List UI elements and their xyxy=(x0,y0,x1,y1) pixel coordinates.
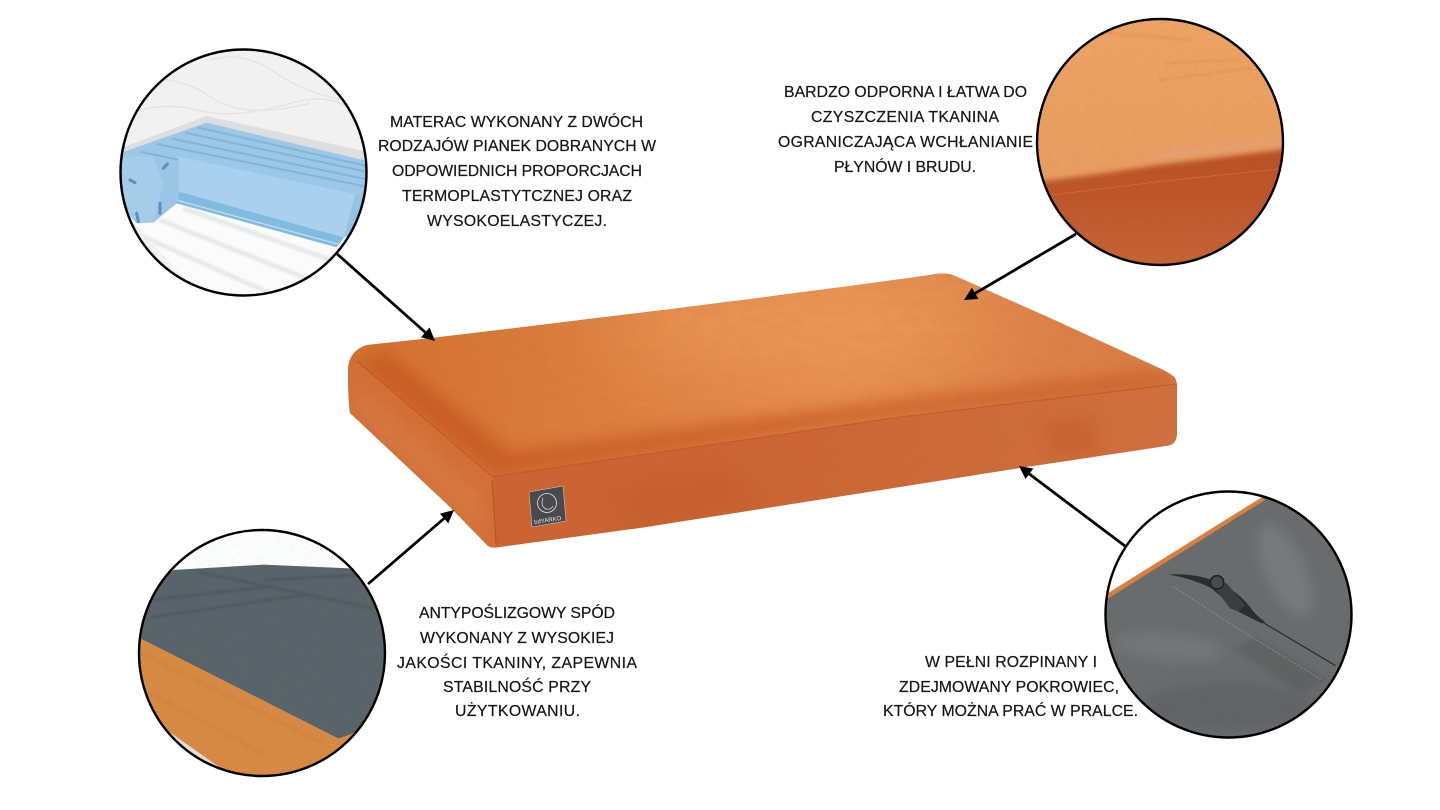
text: underside description xyxy=(397,603,637,720)
text: foam description: MATERAC WYKONANY Z DWÓCH xyxy=(390,112,643,131)
text: underside description: ANTYPOŚLIZGOWY SPÓD xyxy=(419,603,615,622)
text: zipper description: W PEŁNI ROZPINANY I xyxy=(925,654,1097,671)
text: fabric description xyxy=(778,84,1033,176)
circle: anti-slip underside detail xyxy=(138,528,386,778)
mattress product photo xyxy=(340,270,1185,555)
circle: foam interior detail xyxy=(119,48,368,297)
circle: zipper detail xyxy=(1104,490,1353,739)
text: underside description: UŻYTKOWANIU. xyxy=(455,701,580,720)
arrow: fabric to mattress xyxy=(964,234,1076,300)
text: fabric description: OGRANICZAJĄCA WCHŁANIANIE xyxy=(778,134,1033,151)
text: zipper description xyxy=(883,654,1138,720)
text: zipper description: ZDEJMOWANY POKROWIEC, xyxy=(899,679,1119,696)
text: foam description: ODPOWIEDNICH PROPORCJACH xyxy=(392,163,642,180)
text: underside description: JAKOŚCI TKANINY, ZAPEWNIA xyxy=(397,653,637,672)
arrow: underside to mattress xyxy=(368,510,454,584)
text: fabric description: PŁYNÓW I BRUDU. xyxy=(834,157,976,176)
text: fabric description: BARDZO ODPORNA I ŁATWA DO xyxy=(784,84,1027,101)
arrow: zipper to mattress xyxy=(1019,466,1125,546)
brand label xyxy=(529,486,566,527)
text: zipper description: KTÓRY MOŻNA PRAĆ W PRALCE. xyxy=(883,701,1138,720)
text: foam description xyxy=(378,112,656,230)
arrow: foam to mattress xyxy=(336,253,435,341)
text: underside description: STABILNOŚĆ PRZY xyxy=(443,677,591,696)
circle: orange fabric detail xyxy=(1036,18,1284,266)
text: foam description: WYSOKOELASTYCZEJ. xyxy=(427,213,607,230)
text: foam description: TERMOPLASTYTCZNEJ ORAZ xyxy=(402,188,632,205)
text: fabric description: CZYSZCZENIA TKANINA xyxy=(811,109,999,126)
brand label: bdYARKO xyxy=(534,516,562,526)
text: foam description: RODZAJÓW PIANEK DOBRANYCH W xyxy=(378,136,656,155)
text: underside description: WYKONANY Z WYSOKIEJ xyxy=(420,630,614,647)
